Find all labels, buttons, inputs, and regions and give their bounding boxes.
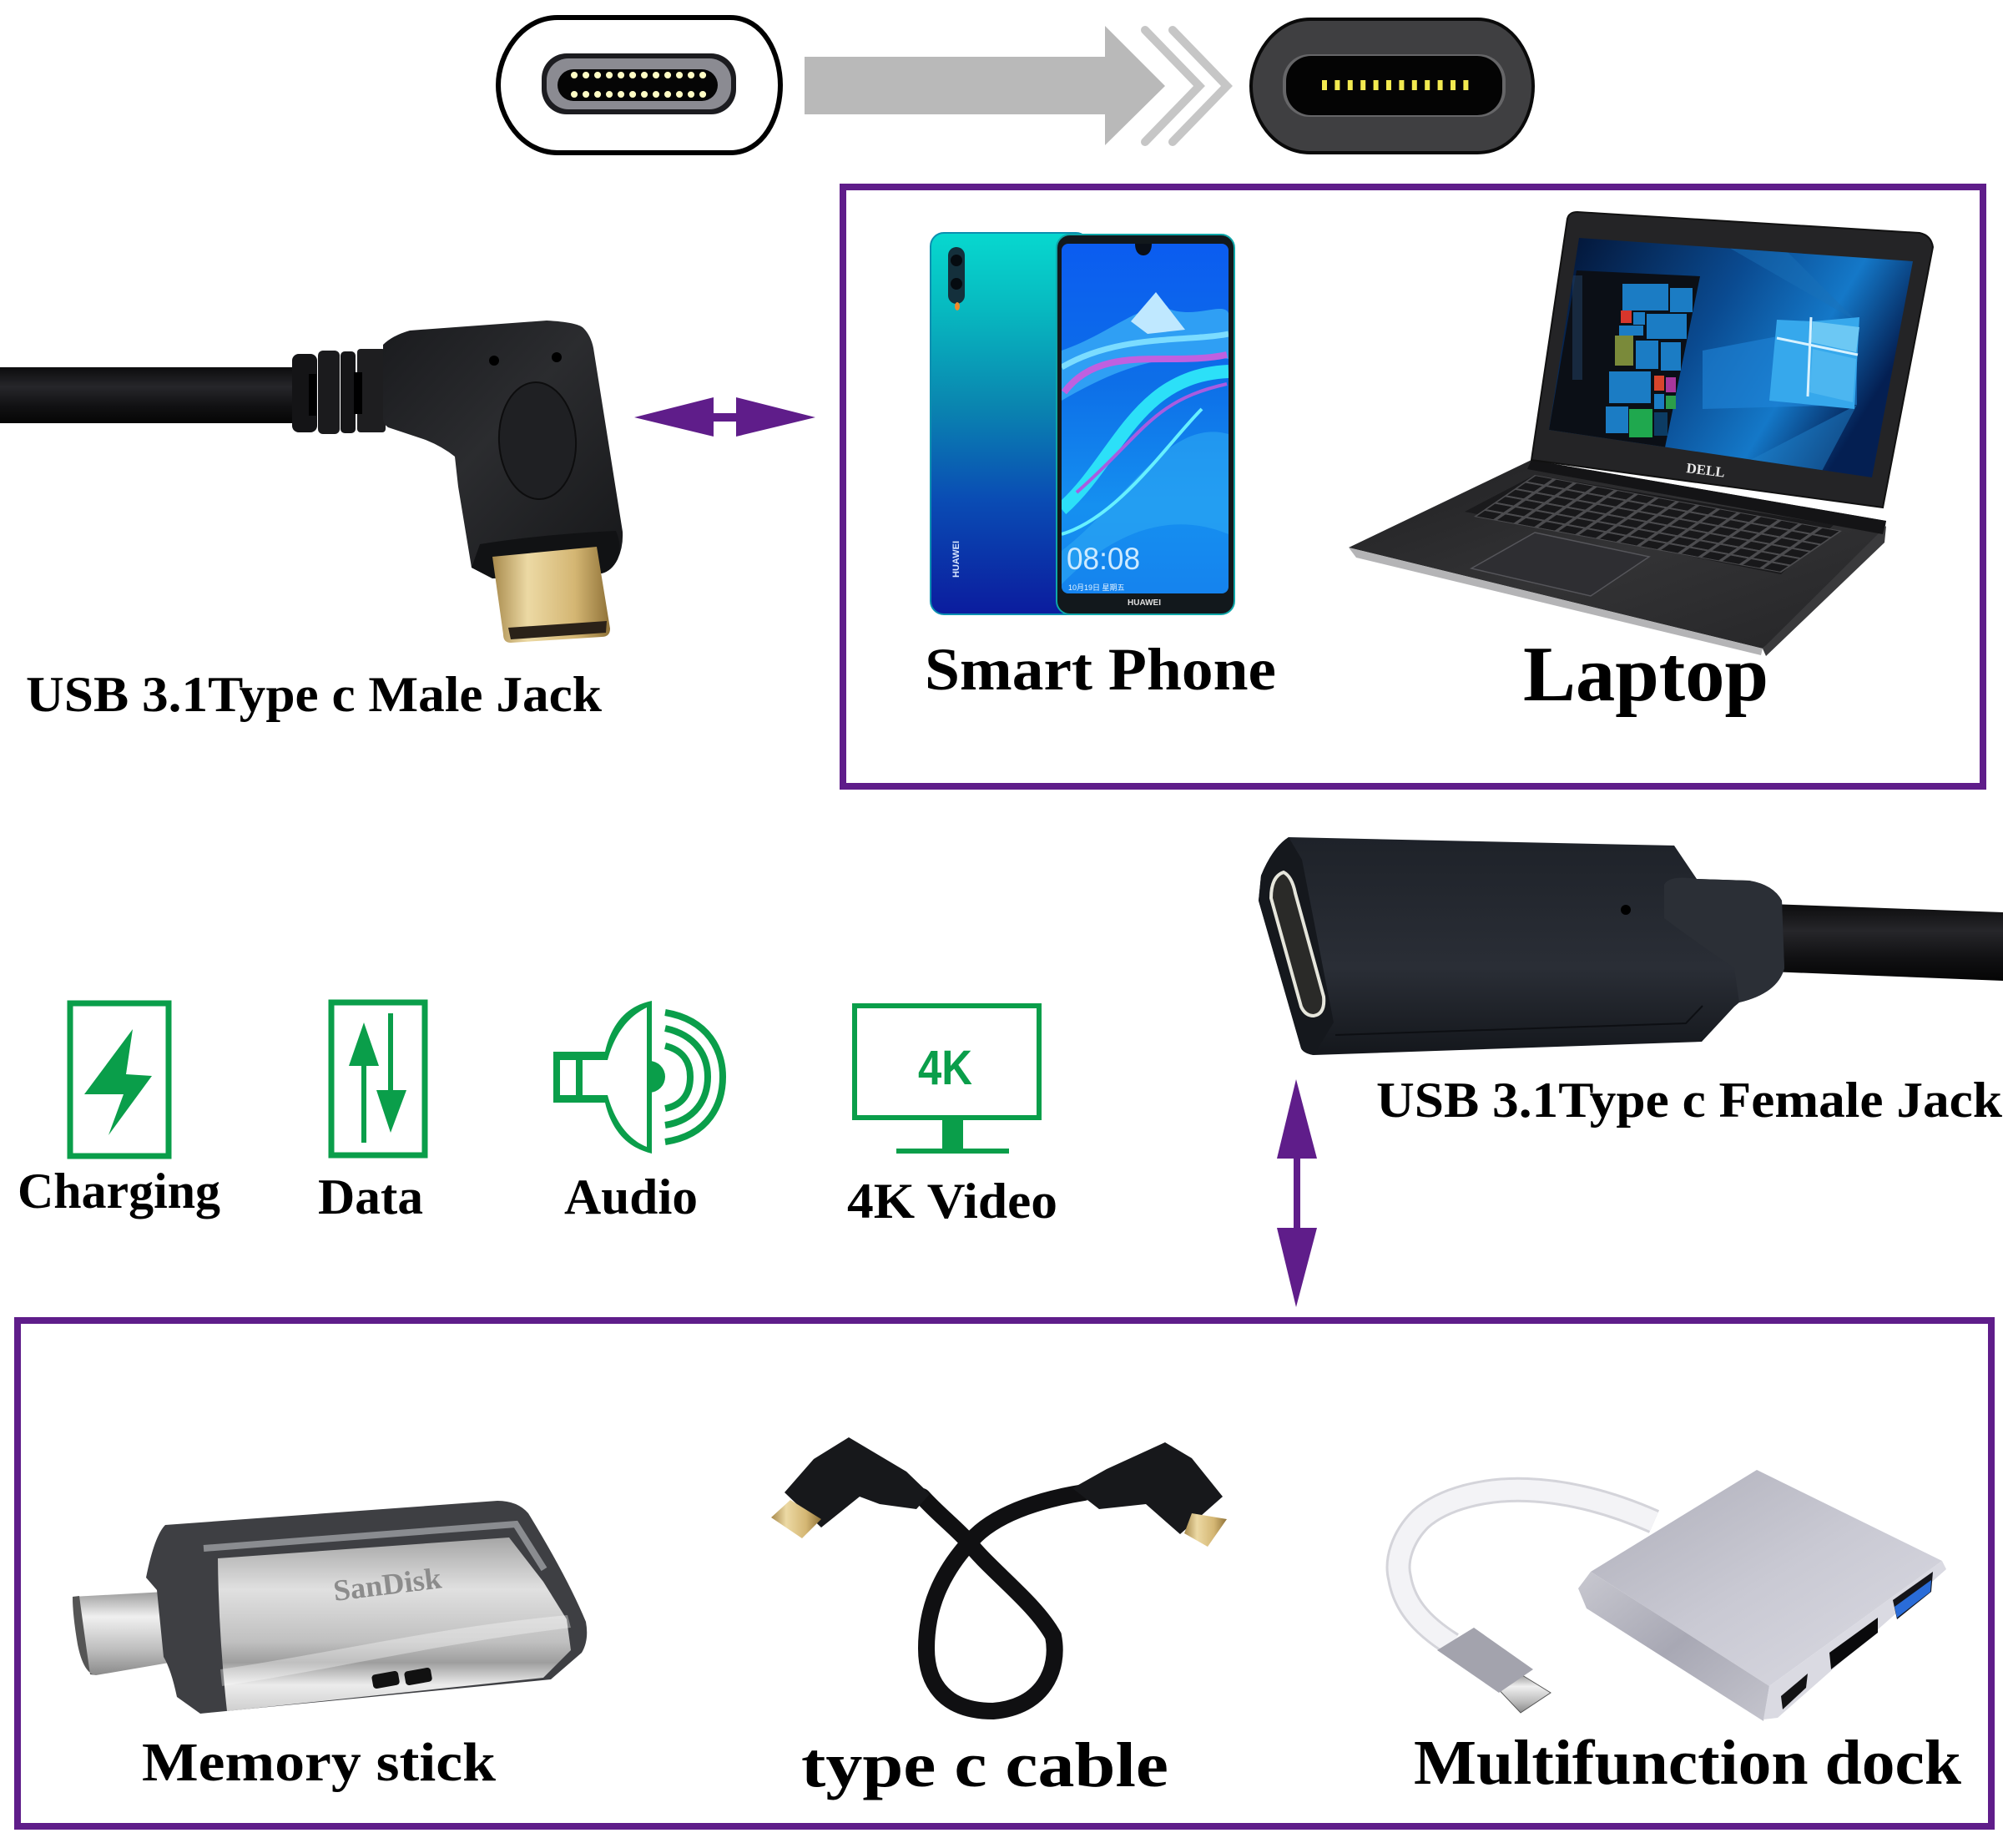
arrow: grey chevron arrow — [805, 26, 1227, 145]
label: Audio: Audio — [564, 1169, 698, 1224]
arrow: horizontal double arrow — [634, 397, 815, 437]
icon: smartphone: 10月19日 星期五 — [1068, 583, 1125, 592]
icon: multifunction dock — [1399, 1470, 1946, 1721]
icon: black USB-C plug — [1251, 19, 1533, 153]
icon: USB-C male right-angle connector — [0, 321, 623, 643]
icon: charging — [70, 1003, 169, 1156]
arrow: vertical double arrow — [1277, 1079, 1317, 1307]
panel: host devices — [843, 187, 1983, 786]
icon: smartphone: HUAWEI — [951, 541, 961, 578]
label: Multifunction dock: Multifunction dock — [1414, 1728, 1962, 1798]
icon: smartphone: HUAWEI — [1128, 598, 1161, 608]
label: Smart Phone: Smart Phone — [925, 636, 1276, 703]
icon: memory stick — [73, 1501, 587, 1714]
icon: white USB-C port — [498, 18, 780, 153]
panel: accessories — [18, 1320, 1991, 1826]
icon: laptop: DELL — [1686, 460, 1726, 481]
label: USB 3.1Type c Female Jack: USB 3.1Type c Female Jack — [1376, 1073, 2003, 1128]
label: Data: Data — [318, 1169, 423, 1224]
label: Memory stick: Memory stick — [142, 1732, 496, 1793]
label: type c cable: type c cable — [801, 1730, 1168, 1800]
icon: audio — [553, 1001, 723, 1154]
label: USB 3.1Type c Male Jack: USB 3.1Type c Male Jack — [26, 667, 603, 722]
icon: memory stick: SanDisk — [331, 1561, 443, 1608]
label: Laptop: Laptop — [1523, 631, 1768, 718]
icon: smartphone — [931, 233, 1234, 614]
icon: 4K monitor — [852, 1006, 1042, 1154]
connector comparison row — [498, 18, 1533, 153]
icon: type c cable — [771, 1437, 1227, 1711]
icon: smartphone: 08:08 — [1067, 542, 1140, 576]
icon: 4K monitor: 4K — [918, 1041, 972, 1095]
icon: data — [331, 1002, 425, 1155]
icon: laptop — [1349, 212, 1933, 656]
label: 4K Video: 4K Video — [847, 1174, 1057, 1229]
icon: USB-C female connector — [1259, 837, 2003, 1055]
label: Charging: Charging — [18, 1164, 220, 1219]
